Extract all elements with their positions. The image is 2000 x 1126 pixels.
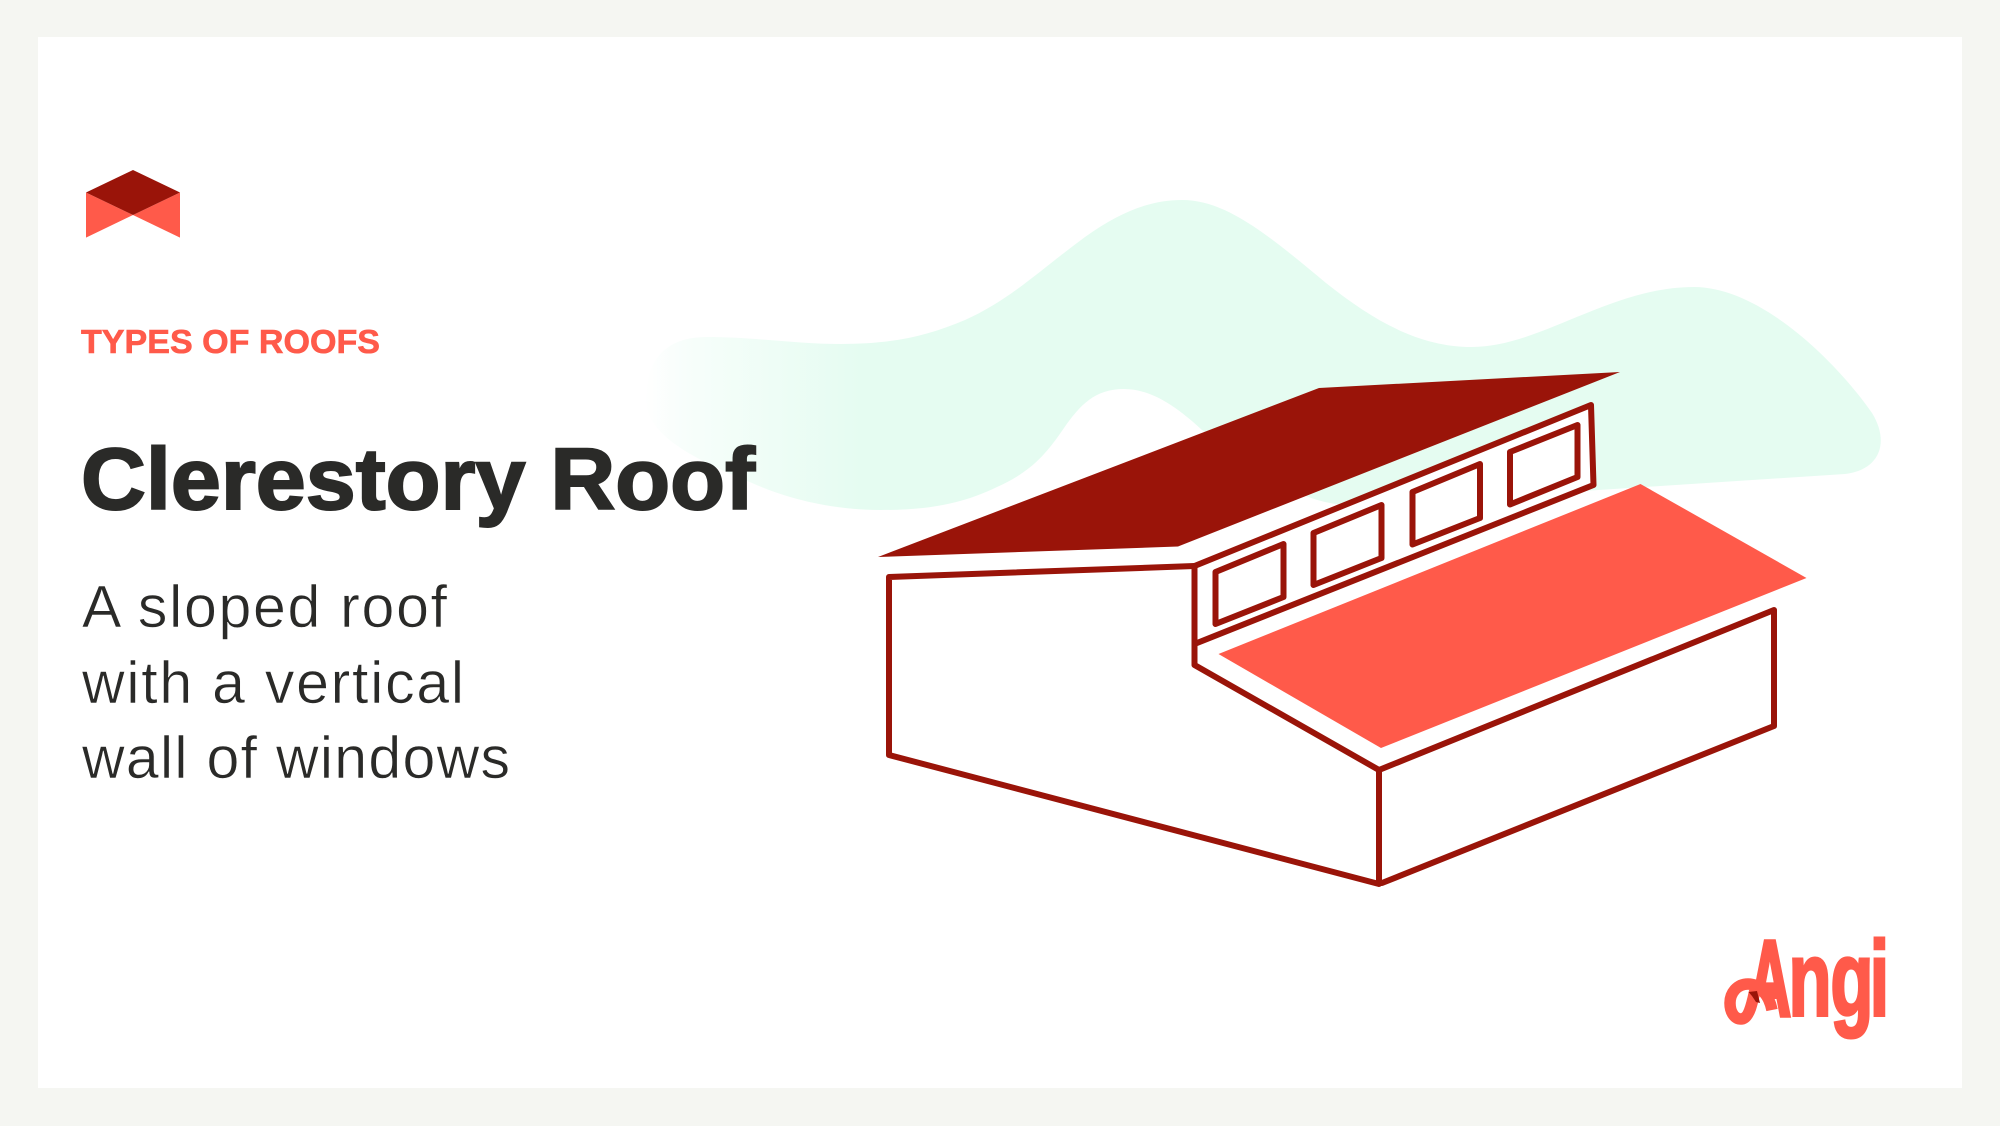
illustration: clerestory house — [878, 372, 1806, 884]
description text — [81, 574, 510, 791]
window 2 — [1314, 505, 1382, 585]
window 1 — [1216, 544, 1284, 624]
background mint blob — [646, 200, 1881, 510]
right wall — [1379, 610, 1774, 883]
Angi logo — [1730, 920, 1889, 1039]
title: Clerestory Roof — [81, 431, 756, 528]
logo swoosh shadow — [1748, 991, 1760, 1003]
clerestory window wall — [1194, 405, 1594, 644]
lower coral roof — [1218, 484, 1806, 748]
window 4 — [1510, 425, 1578, 504]
description text: wall of windows — [81, 725, 510, 791]
logo wedge under arch — [1735, 988, 1769, 1018]
left wall — [889, 566, 1379, 884]
logo icon: roof mark — [86, 170, 180, 238]
eyebrow label: TYPES OF ROOFS — [81, 323, 380, 360]
logo swoosh — [1730, 980, 1772, 1019]
logo letter A: A — [1749, 920, 1791, 1039]
window 3 — [1412, 464, 1480, 544]
logo letters ngi: ngi — [1788, 920, 1889, 1039]
description text: with a vertical — [81, 650, 464, 716]
upper dark roof — [878, 372, 1620, 557]
description text: A sloped roof — [82, 574, 448, 640]
